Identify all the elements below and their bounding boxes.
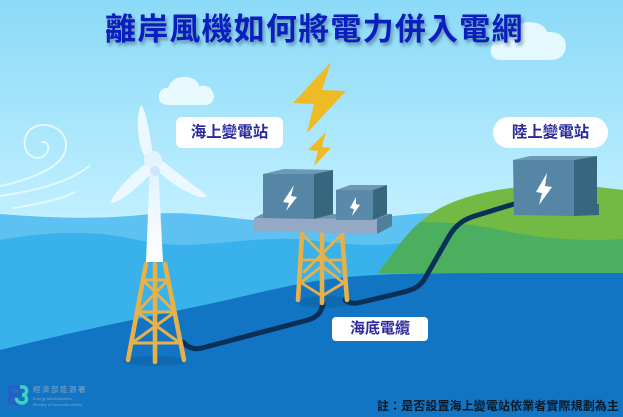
- lightning bolts: [293, 62, 346, 166]
- logo text: Energy Administration,: [33, 396, 73, 401]
- bolt icon: [536, 173, 552, 205]
- logo text: [33, 385, 87, 407]
- label: onshore substation: 陸上變電站: [512, 124, 589, 141]
- turbine blades and hub: [111, 105, 206, 203]
- sky: [0, 0, 623, 225]
- submarine cable: [183, 204, 514, 349]
- title: 離岸風機如何將電力併入電網: [105, 12, 524, 47]
- turbine tower: [146, 165, 163, 262]
- turbine jacket foundation: [128, 264, 184, 362]
- onshore substation box: [513, 156, 599, 216]
- platform jacket foundation: [298, 234, 347, 303]
- hill: [378, 186, 623, 273]
- label: offshore substation: [176, 117, 283, 148]
- label: onshore substation: [493, 117, 608, 148]
- logo text: Ministry of Economic Affairs: [33, 402, 82, 407]
- offshore substation small box: [336, 185, 387, 220]
- footnote: 註：是否設置海上變電站依業者實際規劃為主: [377, 399, 619, 413]
- bolt icon: [350, 197, 360, 216]
- seabed shadows: [123, 356, 187, 366]
- logo text: 經濟部能源署: [33, 385, 87, 394]
- deep sea: [0, 273, 623, 417]
- logo mark: [9, 387, 27, 403]
- label: submarine cable: 海底電纜: [350, 320, 410, 337]
- label: submarine cable: [332, 317, 428, 341]
- offshore platform deck: [254, 214, 392, 234]
- cloud: upper right: [491, 22, 566, 60]
- sea layers: [0, 212, 623, 417]
- bolt icon: [283, 185, 297, 211]
- label: offshore substation: 海上變電站: [191, 124, 268, 141]
- cloud: left: [159, 77, 214, 105]
- offshore substation large box: [263, 169, 333, 219]
- wind swirl: [0, 125, 89, 208]
